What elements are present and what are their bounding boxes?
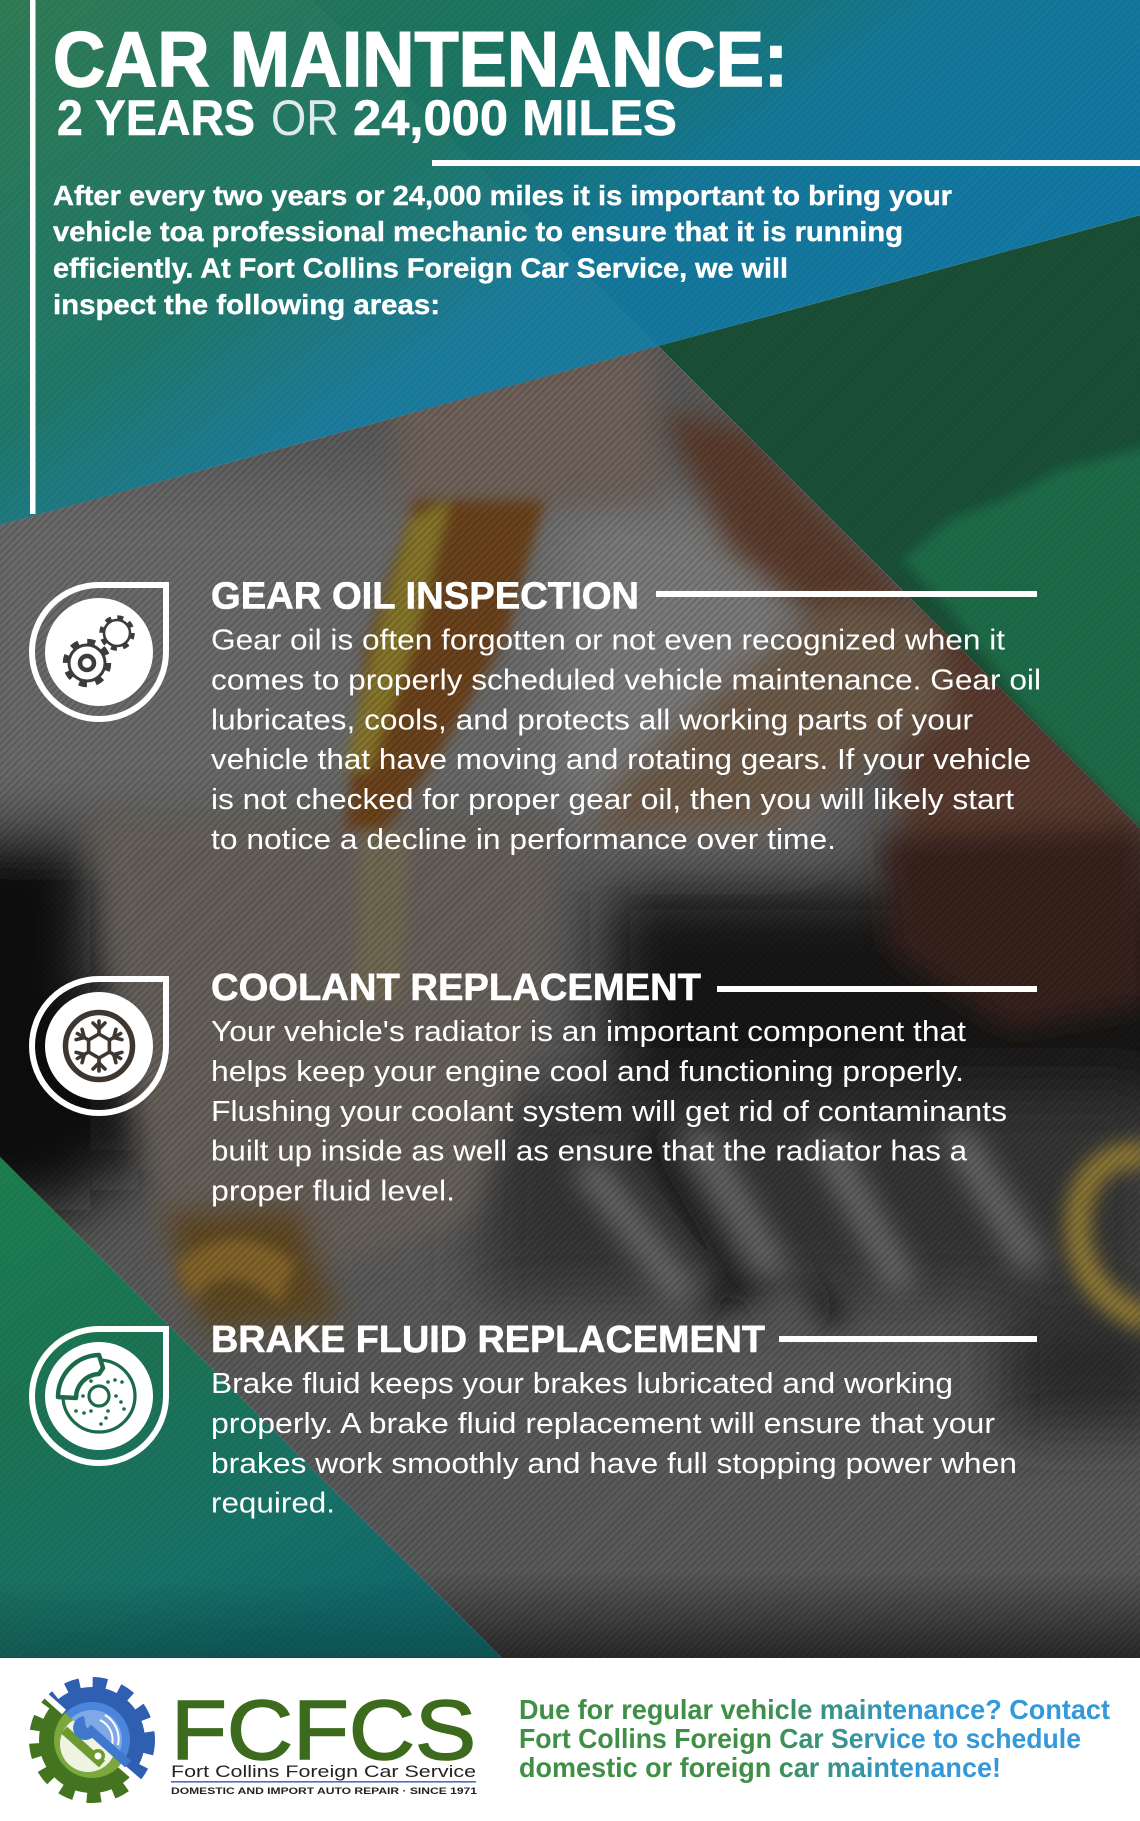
intro paragraph: After every two years or 24,000 miles it is important to bring your [53, 180, 952, 211]
left vertical rule [30, 0, 36, 514]
body text: lubricates, cools, and protects all working parts of your [211, 704, 973, 736]
heading rule [779, 1336, 1037, 1342]
body text: comes to properly scheduled vehicle maintenance. Gear oil [211, 664, 1041, 696]
body text: Your vehicle's radiator is an important component that [211, 1016, 966, 1048]
call to action: Due for regular vehicle maintenance? Contact [519, 1694, 1110, 1725]
body text: helps keep your engine cool and functioning properly. [211, 1056, 964, 1088]
intro paragraph [53, 180, 952, 320]
logo wordmark: Fort Collins Foreign Car Service [171, 1762, 476, 1781]
call to action: Fort Collins Foreign Car Service to schedule [519, 1723, 1081, 1754]
horizontal title rule [432, 160, 1140, 166]
icon: brake disc [32, 1329, 166, 1463]
diagonal stripe texture [0, 216, 1140, 1658]
panel: coolant replacement [32, 967, 1037, 1208]
body text: brakes work smoothly and have full stopping power when [211, 1448, 1017, 1480]
body text: built up inside as well as ensure that the radiator has a [211, 1136, 968, 1168]
intro paragraph: efficiently. At Fort Collins Foreign Car Service, we will [53, 252, 788, 284]
body text: is not checked for proper gear oil, then you will likely start [211, 784, 1014, 816]
background: blue gradient wedge [0, 0, 1140, 525]
body text: required. [211, 1488, 335, 1520]
icon: gears [32, 585, 166, 719]
call to action: domestic or foreign car maintenance! [519, 1752, 1001, 1783]
heading: COOLANT REPLACEMENT [211, 967, 701, 1009]
body text: vehicle that have moving and rotating gears. If your vehicle [211, 744, 1031, 776]
heading rule [656, 591, 1037, 597]
logo wordmark: DOMESTIC AND IMPORT AUTO REPAIR · SINCE 1971 [171, 1786, 478, 1797]
background: dark green wedge [658, 215, 1140, 828]
subtitle: OR [271, 90, 339, 146]
title: CAR MAINTENANCE: [53, 15, 788, 103]
body text [211, 1016, 1007, 1208]
icon: snowflake [32, 979, 166, 1113]
intro paragraph: vehicle toa professional mechanic to ensure that it is running [53, 216, 903, 247]
footer panel [29, 1677, 1110, 1803]
subtitle [57, 90, 677, 146]
intro paragraph: inspect the following areas: [53, 289, 440, 320]
body text [211, 1368, 1017, 1520]
background: green triangle bottom left [0, 1157, 502, 1658]
subtitle: 2 YEARS [57, 90, 255, 146]
wrench [64, 1716, 128, 1764]
body text [211, 624, 1041, 856]
subtitle: 24,000 MILES [353, 90, 677, 146]
heading: GEAR OIL INSPECTION [211, 576, 639, 618]
heading: BRAKE FLUID REPLACEMENT [211, 1319, 765, 1361]
logo wordmark: FCFCS [171, 1683, 476, 1777]
body text: properly. A brake fluid replacement will ensure that your [211, 1408, 995, 1440]
heading rule [717, 986, 1037, 992]
yellow tool handle [1078, 1155, 1140, 1320]
call to action [519, 1694, 1110, 1783]
body text: Gear oil is often forgotten or not even recognized when it [211, 624, 1005, 656]
body text: Flushing your coolant system will get rid of contaminants [211, 1096, 1007, 1128]
body text: to notice a decline in performance over time. [211, 824, 836, 856]
panel: gear oil inspection [32, 576, 1041, 856]
icon: gear and wrench logo [35, 1683, 149, 1797]
body text: Brake fluid keeps your brakes lubricated and working [211, 1368, 953, 1400]
background: oil pouring photo [0, 340, 1140, 1660]
body text: proper fluid level. [211, 1176, 455, 1208]
panel: brake fluid replacement [32, 1319, 1037, 1520]
white gear split [45, 1695, 142, 1784]
title block [53, 15, 788, 146]
